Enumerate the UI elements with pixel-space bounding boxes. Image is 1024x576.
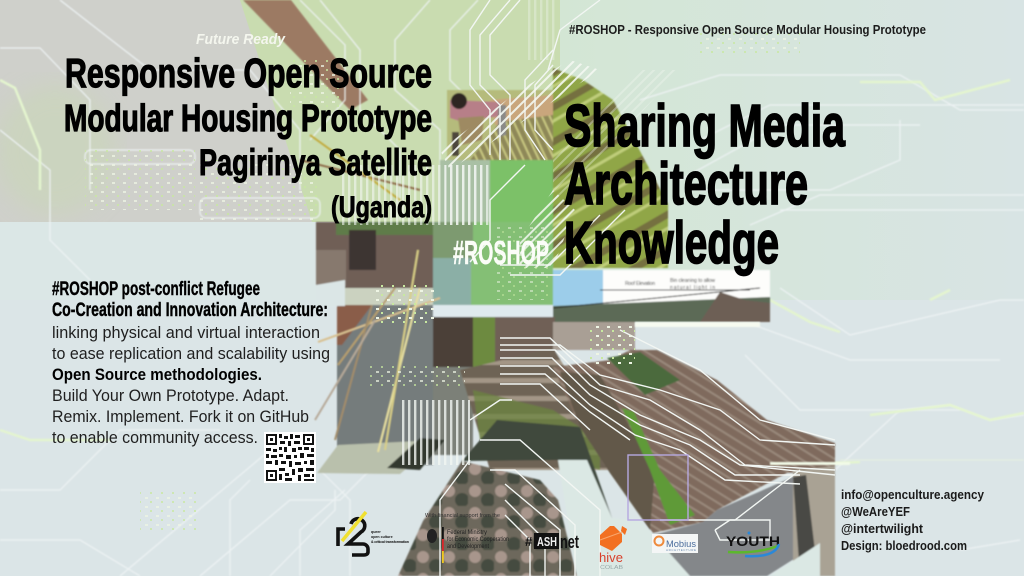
contact details: info@openculture.agency — [841, 487, 985, 502]
logo: ASH net: net — [560, 532, 579, 552]
headline: sharing media architecture knowledge — [564, 93, 846, 276]
logo: federal ministry: for Economic Cooperation — [447, 537, 509, 543]
photo: sketch panel: natural light in — [670, 285, 715, 291]
photo: sketch panel: Roof Elevation — [625, 281, 655, 287]
text block: project description: to ease replication and scalability using — [52, 344, 330, 363]
contact details: @intertwilight — [841, 521, 924, 536]
logo: federal ministry — [425, 513, 509, 563]
logo: hive colab: COLAB — [600, 565, 624, 571]
QR code — [264, 432, 316, 483]
glowing lines — [0, 80, 1024, 465]
logo: mobius: ARCHITECTURE — [666, 548, 696, 552]
photo: brown site — [316, 222, 433, 290]
photo: dark board — [462, 420, 612, 518]
striped traces — [340, 0, 680, 465]
logo: federal ministry: and Development — [447, 544, 489, 550]
photo: grass roof triangle — [553, 68, 668, 268]
contact details — [841, 487, 985, 553]
title: project heading: Modular Housing Prototype — [64, 98, 432, 140]
photo: banded ground — [460, 348, 610, 470]
photo: thatched roofs — [553, 350, 835, 533]
text block: project description: Open Source methodologies. — [52, 365, 262, 384]
board dots — [85, 30, 800, 530]
logo: hive colab — [599, 526, 627, 571]
photo: green circuit column — [440, 160, 553, 222]
contact details: Design: bloedrood.com — [841, 538, 967, 553]
tagline: Future Ready — [196, 32, 286, 48]
logo: youth — [726, 532, 780, 556]
photo: sky strip — [433, 305, 553, 317]
photo: central grey site — [337, 305, 433, 465]
logo: r2g: open culture — [371, 535, 393, 539]
logo: ASH net: # — [525, 534, 533, 549]
photo collage — [300, 68, 835, 576]
logo: r2g — [338, 512, 409, 555]
dots over collage — [370, 225, 635, 387]
title: project heading: Pagirinya Satellite — [199, 142, 432, 183]
logo: r2g: queer — [371, 530, 381, 534]
photo: structure on site — [433, 317, 555, 377]
straw poles — [300, 135, 440, 452]
logo: hive colab: hive — [599, 550, 623, 565]
text block: project description: to enable community access. — [52, 428, 258, 447]
photo: aerial rooftops — [398, 461, 577, 576]
logo: mobius — [652, 534, 698, 553]
logo: mobius: Mobius — [666, 539, 697, 549]
glitch bands — [635, 322, 1024, 465]
logo: federal ministry: With financial support from the — [425, 513, 500, 519]
title: project heading: Responsive Open Source — [65, 50, 432, 96]
photo: sketch panel — [553, 270, 770, 322]
text block: project description: Remix. Implement. Fork it on GitHub — [52, 407, 309, 426]
logo: youth: YOUTH — [726, 533, 780, 549]
text block: project description: linking physical and virtual interaction — [52, 323, 320, 342]
circuit traces: over collage — [440, 0, 835, 576]
hashtag label: #ROSHOP — [453, 234, 549, 271]
contact details: @WeAreYEF — [841, 504, 910, 519]
headline: sharing media architecture knowledge: Sharing Media — [564, 93, 846, 159]
text block: project description: Co-Creation and Innovation Architecture: — [52, 300, 328, 321]
panel: teal and green block — [433, 222, 553, 306]
text block: project description — [52, 279, 330, 447]
headline: sharing media architecture knowledge: Architecture — [564, 151, 808, 217]
title: project heading: (Uganda) — [331, 191, 432, 224]
logo: ASH net: ASH — [537, 535, 557, 549]
photo: worker on straw — [447, 90, 553, 160]
logos row — [338, 512, 780, 571]
light cut-outs — [558, 460, 690, 576]
title: project heading — [64, 32, 432, 224]
headline: sharing media architecture knowledge: Knowledge — [564, 210, 779, 276]
top-right caption: #ROSHOP - Responsive Open Source Modular Housing Prototype — [569, 22, 926, 37]
logo: r2g: & critical transformation — [371, 540, 409, 544]
text block: project description: #ROSHOP post-conflict Refugee — [52, 279, 260, 300]
photo: sketch panel: Bin cleaning to allow — [670, 278, 715, 284]
photo: grey slab — [653, 477, 813, 576]
logo: ASH net — [525, 532, 579, 552]
text block: project description: Build Your Own Prototype. Adapt. — [52, 386, 289, 405]
logo: federal ministry: Federal Ministry — [447, 530, 487, 536]
